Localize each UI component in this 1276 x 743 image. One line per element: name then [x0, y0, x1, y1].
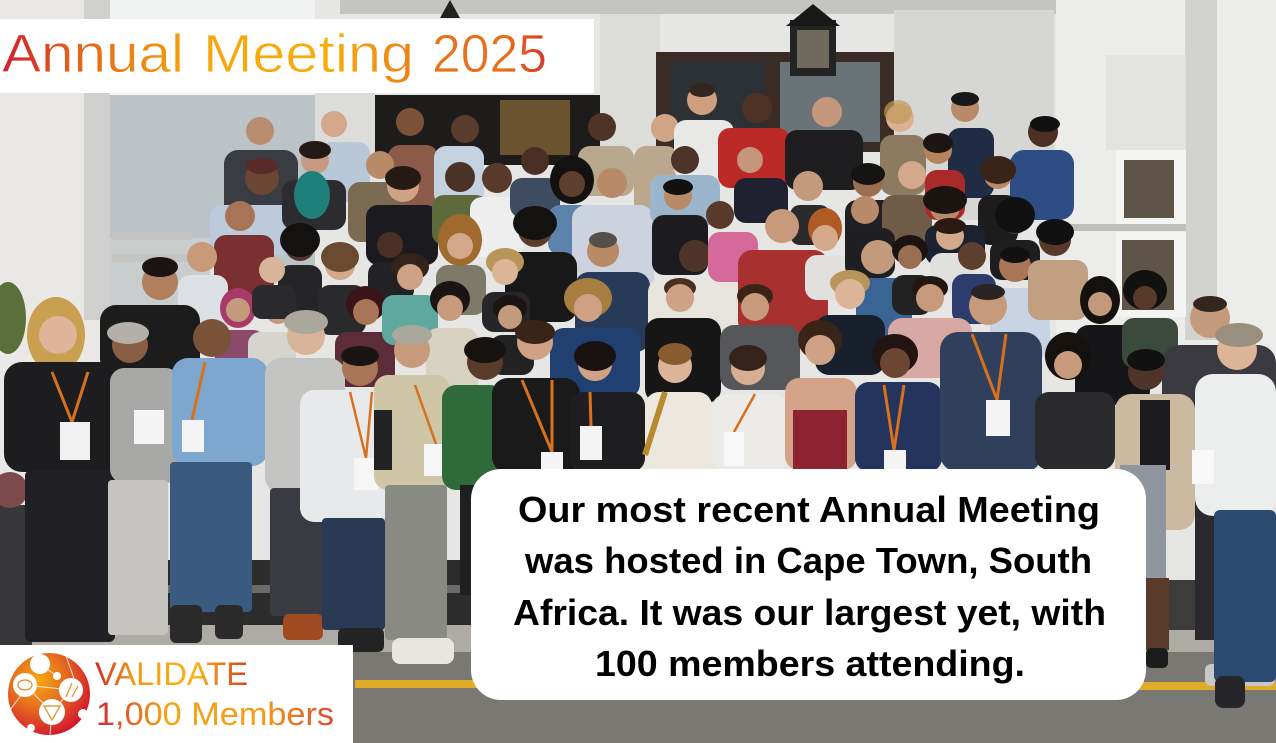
person 12: red dress	[785, 320, 857, 470]
person 1: black top	[4, 297, 120, 642]
callout text: Africa. It was our largest yet, with	[513, 592, 1106, 633]
back row of people	[224, 83, 1074, 220]
person 13: navy blazer	[855, 334, 942, 472]
logo wordmark	[95, 656, 334, 732]
callout text	[513, 489, 1106, 684]
person 14: navy sweater	[940, 284, 1042, 472]
title	[2, 24, 547, 84]
person 17: dark suit	[1162, 296, 1276, 640]
person 7: green dress	[442, 337, 506, 595]
person 11: white top	[712, 345, 787, 472]
title: Meeting	[203, 24, 414, 84]
icon: hanging lantern	[786, 4, 840, 76]
person 2: grey jacket	[107, 322, 180, 635]
person 6: vest and grey trousers	[374, 325, 454, 664]
person 8: black top	[492, 320, 580, 474]
callout text: 100 members attending.	[595, 643, 1025, 684]
logo wordmark: 1,000 Members	[96, 696, 334, 732]
title: Annual	[2, 24, 184, 84]
title: 2025	[432, 24, 547, 84]
second row of people	[210, 133, 1040, 295]
person 18: white blouse and jeans	[1192, 323, 1276, 708]
person 16: cream jacket	[1115, 349, 1195, 668]
logo wordmark: VALIDATE	[95, 656, 248, 692]
fourth row of people	[215, 248, 1178, 405]
third row of people	[100, 179, 1088, 375]
icon: VALIDATE logo	[8, 653, 90, 735]
person 9: black top	[570, 341, 645, 472]
title banner	[0, 19, 594, 93]
person 15: striped top	[1035, 332, 1115, 470]
callout text: was hosted in Cape Town, South	[524, 540, 1092, 581]
front row of people	[4, 284, 1276, 708]
person 5: white shirt	[300, 346, 385, 652]
callout text: Our most recent Annual Meeting	[518, 489, 1100, 530]
person 10: cream blouse	[645, 343, 712, 472]
logo panel	[0, 645, 353, 743]
person 3: blue shirt	[170, 319, 268, 643]
callout panel	[471, 469, 1146, 700]
potted plant	[0, 282, 32, 645]
person 4: grey cardigan	[265, 310, 345, 640]
